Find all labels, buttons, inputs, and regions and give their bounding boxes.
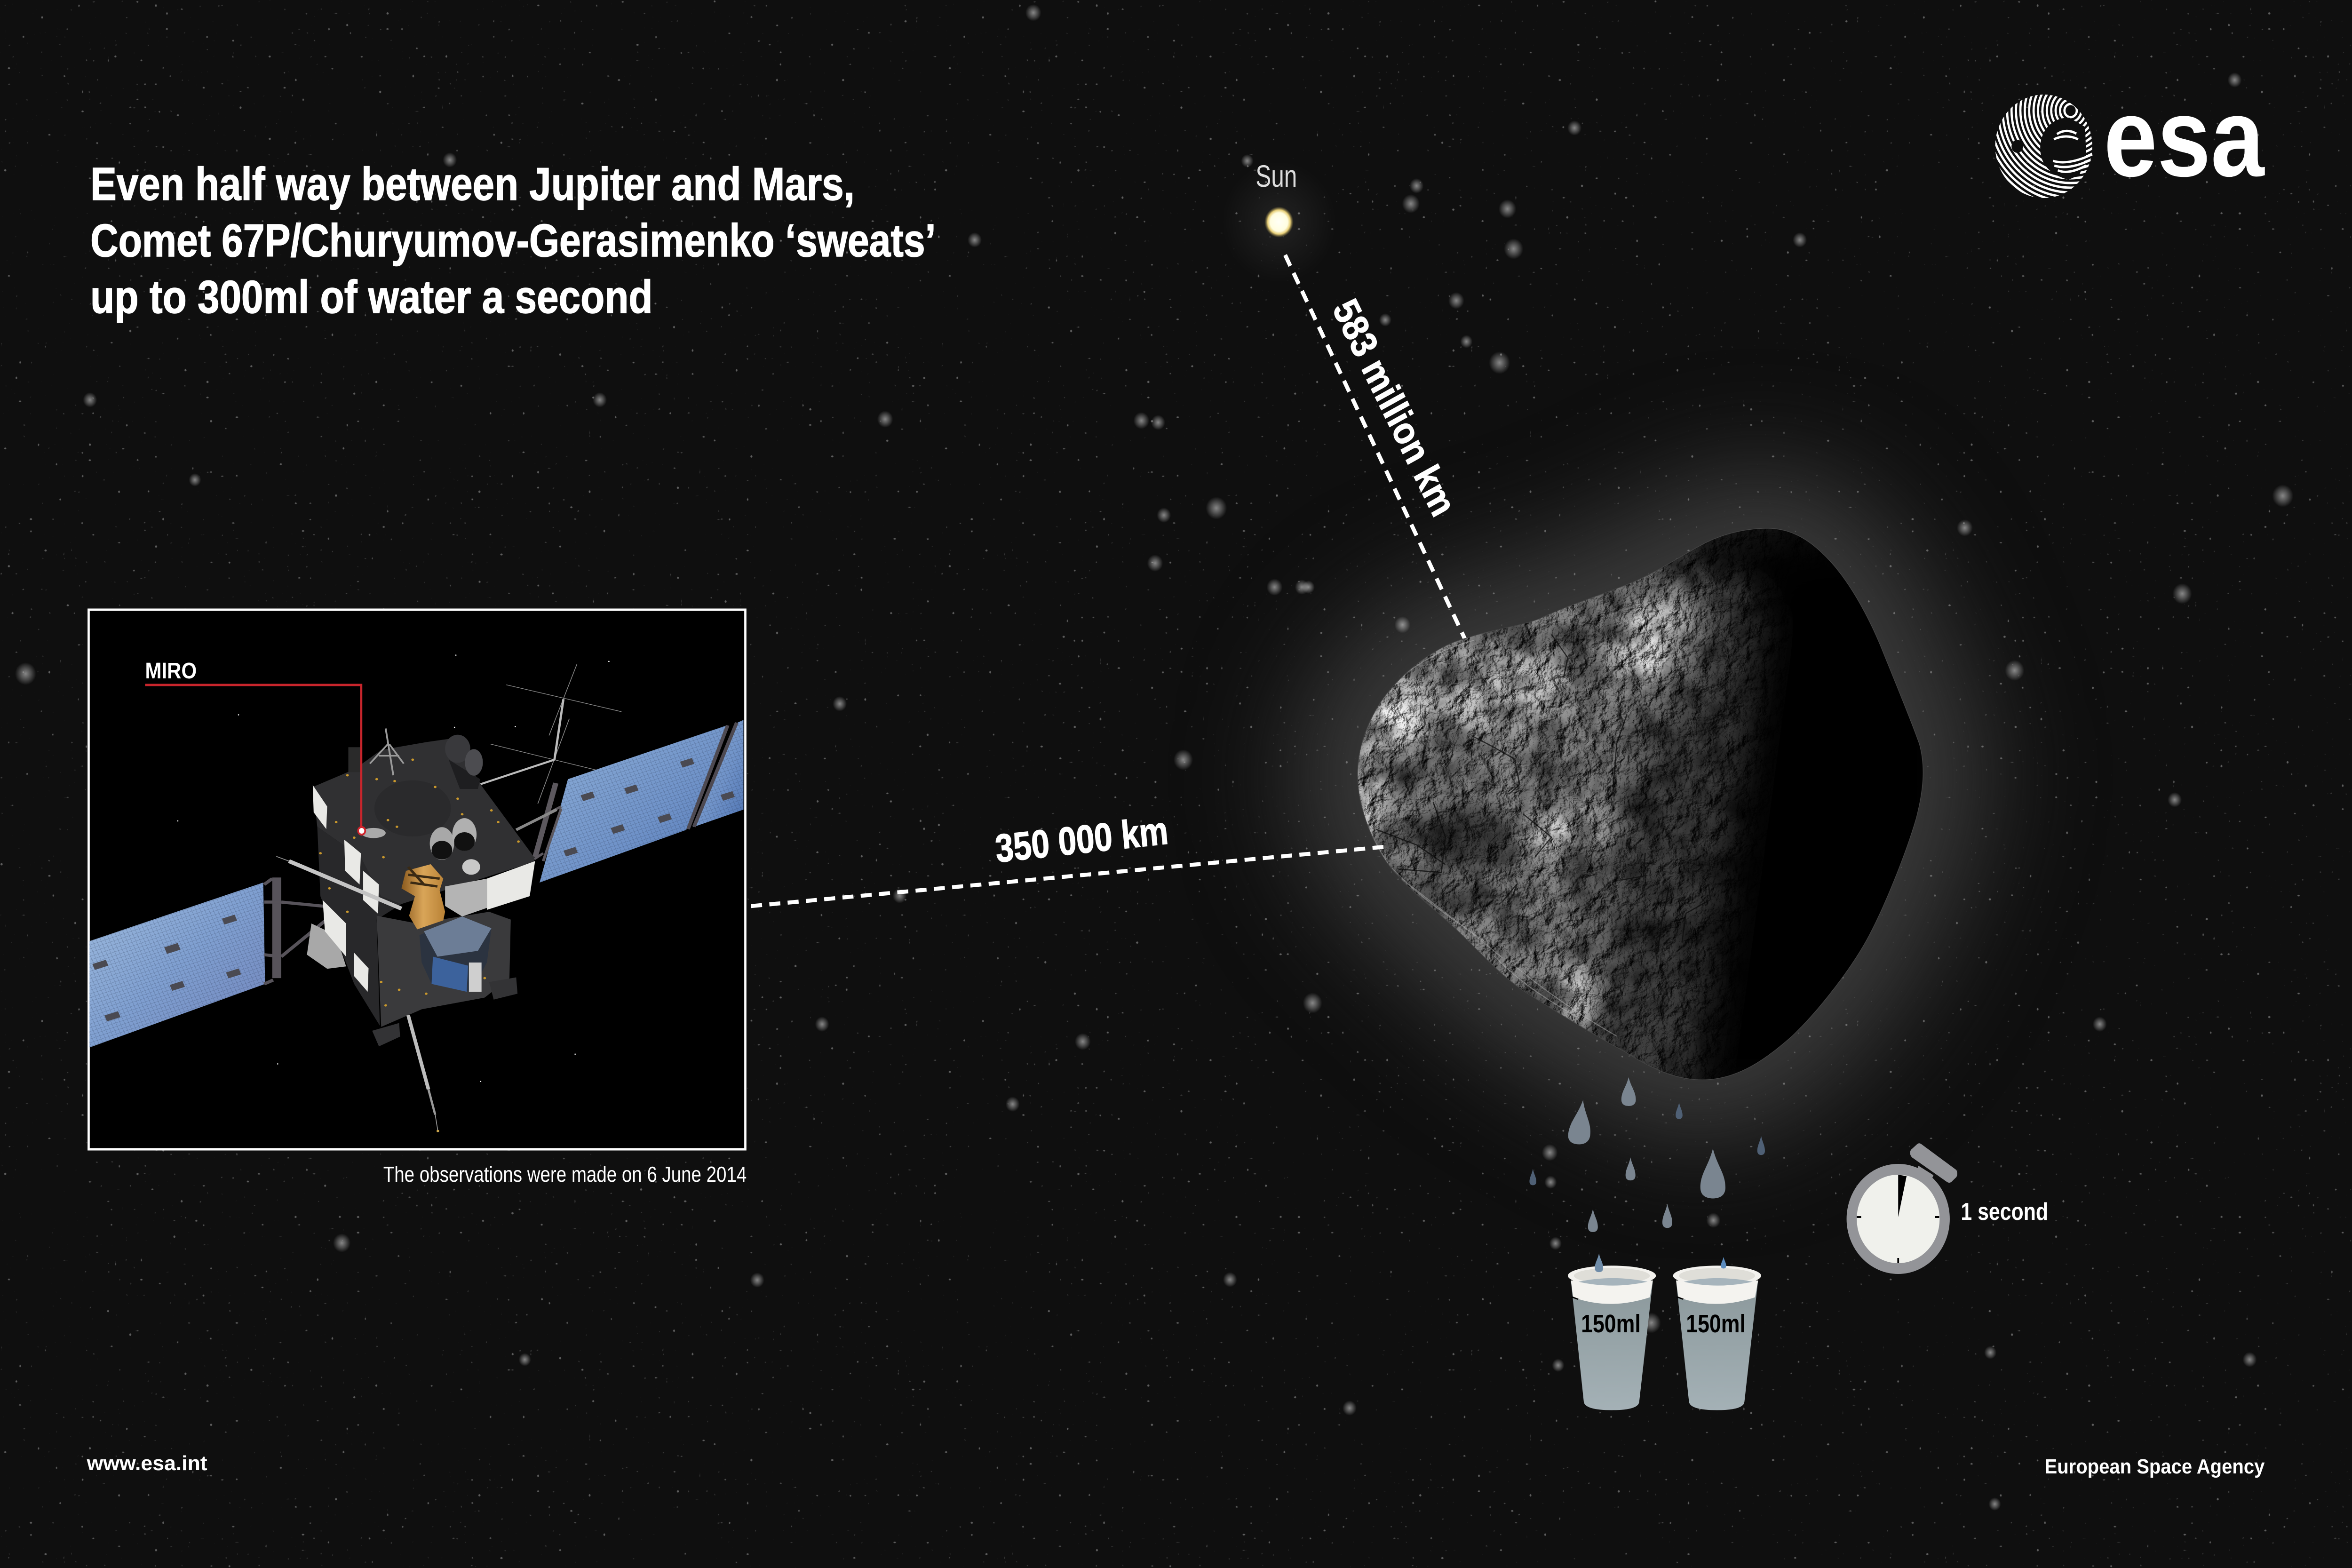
tripod mast (370, 728, 404, 775)
deck circle (374, 780, 451, 836)
water drops (1529, 1077, 1765, 1232)
comet edge (1358, 528, 1923, 1080)
label: 583 million km: 583 million km (1325, 292, 1464, 523)
antenna array (478, 664, 621, 804)
cup 1 (1568, 1253, 1656, 1410)
cup 2 label: 150ml (1686, 1310, 1746, 1338)
yellow fasteners (319, 758, 520, 1007)
white radiators (313, 785, 535, 992)
label: 1 second: 1 second (1961, 1198, 2048, 1225)
comet (1357, 528, 1923, 1080)
surface cracks (1376, 634, 1710, 954)
title (90, 159, 936, 323)
instrument boom (276, 856, 401, 909)
spacecraft body front (377, 912, 511, 1027)
left panel yoke (264, 877, 341, 984)
title: Comet 67P/Churyumov-Gerasimenko ‘sweats’ (90, 215, 936, 267)
caption: The observations were made on 6 June 2014 (383, 1163, 747, 1186)
title: Even half way between Jupiter and Mars, (90, 159, 855, 210)
esa logo (1995, 95, 2265, 198)
MIRO leader line (145, 685, 365, 835)
MIRO label: MIRO (145, 658, 197, 683)
cameras (445, 735, 483, 789)
spacecraft top deck (313, 738, 534, 904)
sensor sphere (462, 859, 480, 875)
Philae lander (420, 916, 492, 992)
esa wordmark: esa (2104, 75, 2265, 200)
distance line: sun to comet (1285, 255, 1465, 639)
cup 2 (1673, 1257, 1761, 1410)
panel: Rosetta spacecraft inset (88, 610, 745, 1149)
comet glow (1358, 528, 1923, 1080)
title: up to 300ml of water a second (90, 271, 653, 323)
spacecraft illustration (89, 654, 743, 1132)
cup 1 label: 150ml (1581, 1310, 1641, 1338)
limb striations (1364, 640, 1617, 1036)
right panel yoke (516, 723, 737, 861)
gold foil (401, 864, 445, 929)
lower boom (408, 1015, 439, 1132)
agency name: European Space Agency (2045, 1455, 2265, 1478)
distance line: spacecraft to comet (751, 847, 1384, 906)
label: 350 000 km: 350 000 km (993, 808, 1170, 871)
top box (348, 747, 360, 772)
feet (372, 977, 517, 1046)
sun label: Sun (1255, 159, 1297, 193)
nozzle (307, 923, 346, 969)
grey box (445, 879, 487, 916)
sun (1222, 159, 1336, 283)
left solar panel (89, 883, 265, 1048)
spacecraft body side (317, 827, 401, 1026)
right solar panel (540, 720, 743, 883)
website: www.esa.int (87, 1452, 207, 1475)
radiometer horns (430, 818, 477, 860)
comet surface (1323, 494, 1976, 1118)
MIRO dish (361, 828, 386, 838)
stopwatch (1847, 1143, 1957, 1274)
